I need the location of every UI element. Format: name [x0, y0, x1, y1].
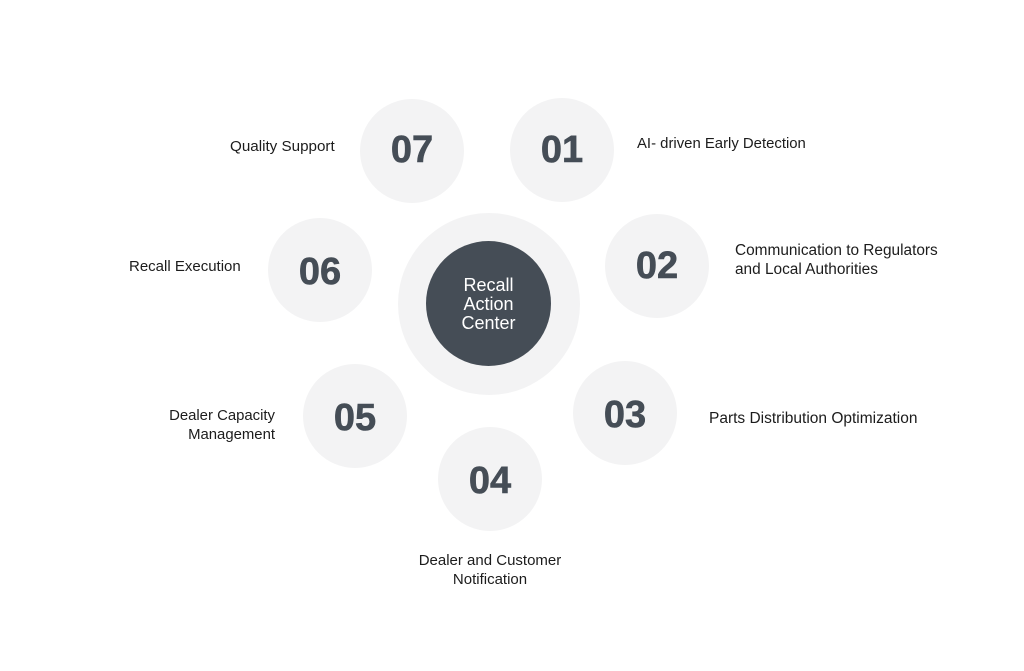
label 05: Dealer Capacity	[169, 408, 275, 424]
number circle 07	[360, 99, 464, 203]
label 04: Dealer and Customer	[419, 552, 561, 569]
label 01: AI- driven Early Detection	[637, 136, 806, 152]
label 03: Parts Distribution Optimization	[709, 410, 917, 427]
label 05: Management	[188, 427, 275, 443]
label 05	[169, 408, 275, 443]
number circle 07: 07	[391, 129, 433, 171]
number circle 04	[438, 427, 542, 531]
number circle 01	[510, 98, 614, 202]
number circle 05: 05	[334, 397, 376, 439]
center hub: Recall Action Center	[398, 213, 580, 395]
label 07: Quality Support	[230, 138, 335, 155]
number circle 04: 04	[469, 460, 511, 502]
number circle 01: 01	[541, 129, 583, 171]
number circle 02: 02	[636, 245, 678, 287]
number circle 05	[303, 364, 407, 468]
center dark circle with label	[426, 241, 551, 366]
label 02	[735, 242, 938, 278]
number circle 03: 03	[604, 394, 646, 436]
number circle 06	[268, 218, 372, 322]
label 04: Notification	[453, 571, 527, 588]
center dark circle with label: Center	[461, 313, 516, 333]
label 02: Communication to Regulators	[735, 242, 938, 259]
center dark circle with label: Recall	[463, 275, 514, 295]
number circle 06: 06	[299, 251, 341, 293]
label 02: and Local Authorities	[735, 261, 878, 278]
label 06: Recall Execution	[129, 258, 241, 275]
center dark circle with label: Action	[463, 294, 514, 314]
label 04	[419, 552, 561, 588]
number circle 02	[605, 214, 709, 318]
number circle 03	[573, 361, 677, 465]
